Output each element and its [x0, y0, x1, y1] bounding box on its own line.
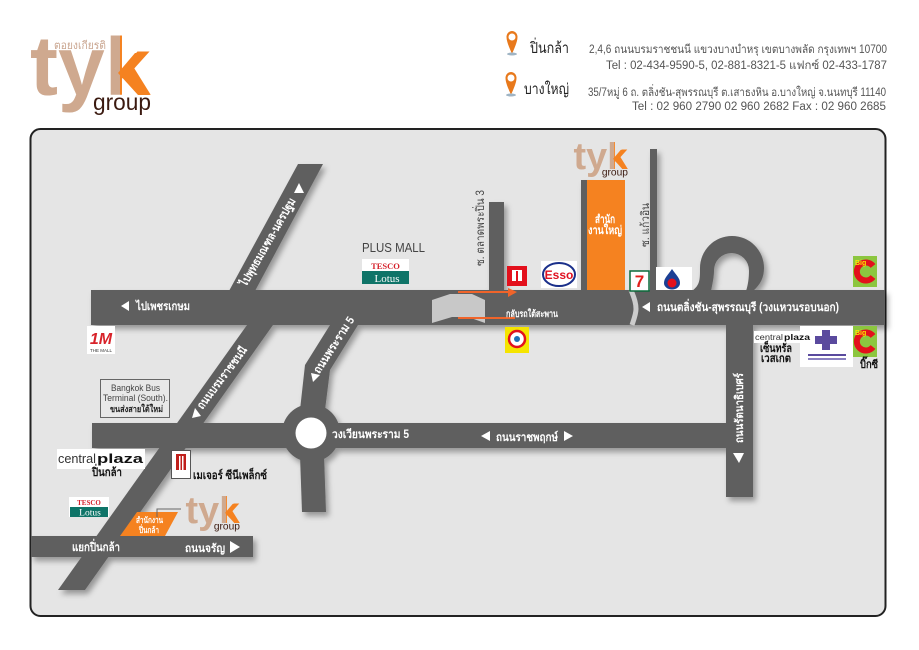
logo: Isuzu — [507, 266, 527, 286]
logo: Tesco Lotus bottom: TESCO — [77, 499, 101, 507]
head office label — [588, 212, 622, 237]
logo: Big C top: Big — [855, 260, 866, 267]
logo: Central Plaza Pinklao — [57, 449, 145, 469]
callout: bus terminal: Terminal (South). — [103, 393, 168, 403]
head office block — [587, 180, 625, 290]
road label: Phetkasem: ไปเพชรเกษม — [134, 299, 190, 313]
icon: map pin Pinklao — [506, 31, 518, 56]
logo: Tesco Lotus bottom — [69, 497, 109, 518]
logo: Tesco Lotus top: TESCO — [371, 261, 400, 271]
tyk logo: Pinklao: k — [219, 490, 240, 531]
logo: Tesco Lotus top: Lotus — [374, 273, 400, 285]
logo: Central Plaza west — [754, 331, 813, 343]
road label: Charan: ถนนจรัญ — [185, 542, 225, 555]
logo: PTT — [656, 267, 692, 290]
road label: Ratchaphruek — [481, 430, 573, 444]
road label: Ratchaphruek: ถนนราชพฤกษ์ — [496, 430, 558, 444]
heading: Plus Mall: PLUS MALL — [362, 241, 425, 255]
heading: Bangyai: บางใหญ่ — [524, 80, 569, 98]
icon: map pin Bangyai — [506, 72, 516, 96]
road label: Phutthamonthon: ไปพุทธมณฑล-นครปฐม — [236, 195, 299, 291]
road label: Rama 5 circle: วงเวียนพระราม 5 — [332, 428, 410, 441]
logo: Esso: Esso — [545, 268, 573, 282]
overpass — [432, 294, 485, 323]
road network — [31, 149, 885, 590]
u-turn arrow — [458, 288, 517, 319]
logo: Tesco Lotus top — [362, 259, 409, 285]
head office label: สำนัก — [595, 212, 615, 226]
address: Pinklao — [589, 43, 887, 72]
logo: tyk group main: ตอยงเกียรติ — [54, 39, 106, 52]
address: Bangyai: Tel : 02 960 2790 02 960 2682 Fax : 02 960 2685 — [632, 101, 886, 113]
heading: Pinklao: ปิ่นกล้า — [529, 37, 569, 57]
soi label: Kaeo In: ซ. แก้วอิน — [639, 203, 652, 247]
road label: Phetkasem — [121, 299, 190, 313]
logo: Big C top — [853, 256, 877, 287]
address: Pinklao: Tel : 02-434-9590-5, 02-881-8321-5 แฟกซ์ 02-433-1787 — [606, 58, 887, 72]
callout: bus terminal: Bangkok Bus — [111, 383, 160, 393]
logo: tyk group main — [30, 19, 151, 115]
logo: Tesco Lotus bottom: Lotus — [79, 508, 101, 518]
callout: bus terminal: ขนส่งสายใต้ใหม่ — [110, 403, 163, 414]
logo: Susco — [505, 327, 529, 353]
logo: 7-Eleven — [630, 271, 649, 291]
logo: 7-Eleven: 7 — [635, 272, 644, 291]
label: Central West Gate — [760, 340, 792, 365]
address: Bangyai — [588, 84, 886, 113]
label: Pinklao: ปิ่นกล้า — [91, 463, 122, 479]
logo: The Mall — [87, 326, 115, 354]
logo: Central Plaza west: central — [755, 333, 783, 342]
tyk logo: Pinklao — [186, 490, 240, 532]
tyk logo: head office: k — [607, 136, 628, 177]
tyk logo: Pinklao: ty — [186, 490, 219, 532]
logo: The Mall: THE MALL — [90, 348, 112, 353]
logo: Esso — [541, 261, 577, 288]
median strip — [631, 290, 636, 325]
logo: tyk group main: ty — [30, 19, 105, 113]
roundabout centre — [296, 418, 326, 448]
logo: The Mall: 1M — [90, 331, 113, 348]
label: Big C: บิ๊กซี — [860, 356, 878, 371]
Pinklao office marker: สำนักงาน — [136, 515, 163, 525]
label: Major Cineplex: เมเจอร์ ซีนีเพล็กซ์ — [193, 467, 267, 482]
callout: bus terminal — [100, 380, 170, 418]
logo: Major Cineplex — [172, 450, 190, 478]
label: Central West Gate: เซ็นทรัล — [760, 340, 792, 355]
logo: Big C bottom: Big — [855, 330, 866, 337]
logo: Central Plaza west: plaza — [784, 333, 811, 342]
road label: Borommaratchachonnani: ถนนบรมราชชนนี — [194, 344, 250, 412]
panel: map background — [30, 129, 886, 616]
Pinklao office marker: ปิ่นกล้า — [139, 523, 159, 535]
tyk logo: head office: group — [602, 168, 628, 179]
logo: Hospital — [800, 326, 853, 367]
logo: tyk group main: k — [105, 22, 151, 113]
road label: Rama 5: ถนนพระราม 5 — [312, 314, 358, 376]
road label: Taling Chan: ถนนตลิ่งชัน-สุพรรณบุรี (วงแหวนรอบนอก) — [657, 298, 839, 315]
soi label: Talat Phra Pin 3: ซ. ตลาดพระปิ่น 3 — [472, 190, 487, 266]
head office label: งานใหญ่ — [588, 223, 622, 237]
label: Central West Gate: เวสเกต — [761, 353, 791, 365]
tyk logo: head office — [574, 136, 628, 178]
road label: Taling Chan — [642, 298, 839, 315]
road label: Rattanathibet: ถนนรัตนาธิเบศร์ — [732, 372, 746, 443]
road label: Pinklao junction: แยกปิ่นกล้า — [72, 538, 120, 554]
logo: Central Plaza Pinklao: central — [58, 452, 96, 466]
tyk logo: Pinklao: group — [214, 522, 240, 533]
tyk logo: head office: ty — [574, 136, 607, 178]
Pinklao office marker — [120, 509, 181, 536]
logo: Big C bottom — [853, 326, 877, 357]
road label: Borommaratchachonnani — [192, 344, 250, 418]
logo: Central Plaza Pinklao: plaza — [97, 452, 145, 466]
road label: Rattanathibet — [732, 372, 746, 463]
road label: u-turn: กลับรถใต้สะพาน — [506, 308, 558, 320]
logo: tyk group main: group — [93, 89, 151, 115]
